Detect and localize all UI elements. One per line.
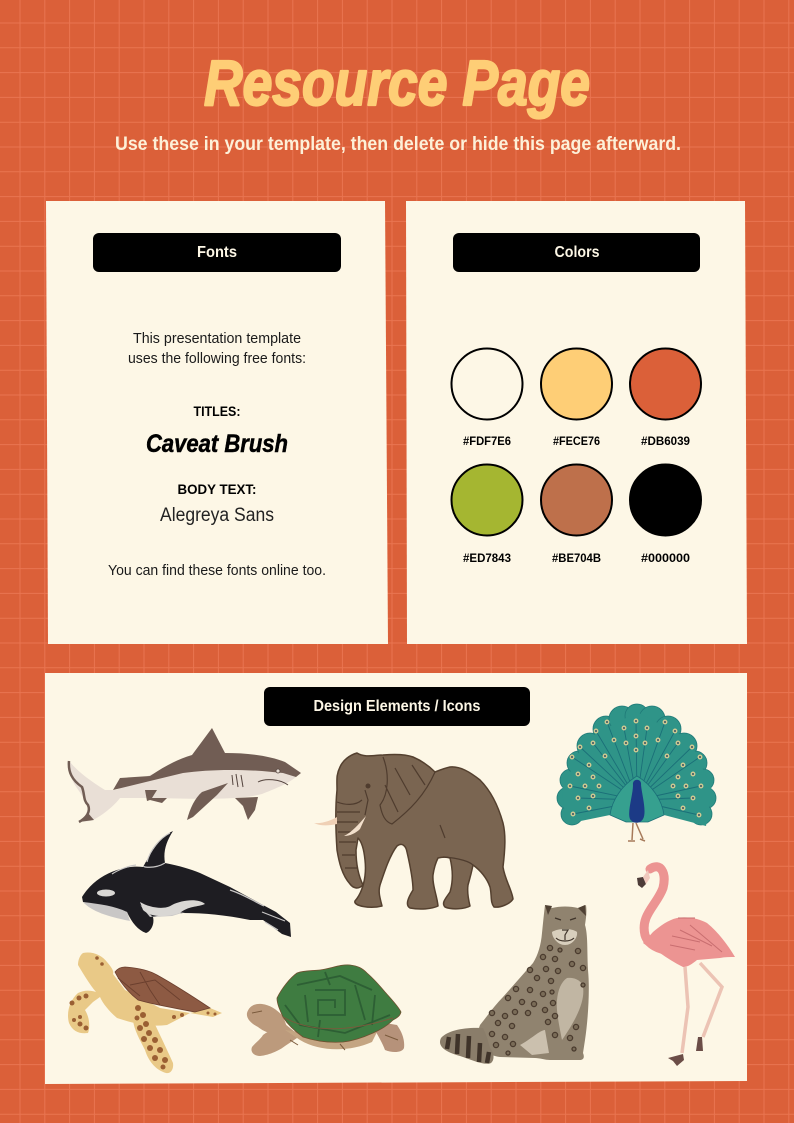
- text: titles font: TITLES:: [194, 403, 240, 419]
- swatch: ED7843: #ED7843: [463, 553, 511, 565]
- swatch: BE704B: [541, 464, 612, 565]
- text: intro: This presentation template: [133, 330, 301, 347]
- swatch: FDF7E6: #FDF7E6: [463, 436, 511, 448]
- icon: orca: [82, 831, 291, 937]
- text: titles font: Caveat Brush: [146, 430, 288, 458]
- swatch: 000000: #000000: [641, 553, 690, 565]
- heading: fonts: Fonts: [197, 244, 237, 261]
- icon: tortoise: [247, 965, 404, 1056]
- icon: sea turtle: [68, 952, 222, 1073]
- swatch: BE704B: #BE704B: [552, 553, 601, 565]
- heading: colors: [453, 233, 700, 272]
- text: titles font: [146, 403, 288, 458]
- swatch: FECE76: [541, 348, 612, 448]
- swatch: FDF7E6: [452, 348, 522, 448]
- text: intro: [128, 330, 306, 367]
- panel: colors: [406, 201, 747, 644]
- text: body font: BODY TEXT:: [178, 481, 256, 497]
- panel: fonts: [46, 201, 388, 644]
- swatch: DB6039: [630, 348, 701, 448]
- subtitle: Use these in your template, then delete or hide this page afterward.: [115, 134, 681, 155]
- text: note: You can find these fonts online too.: [108, 562, 326, 579]
- swatch: FECE76: #FECE76: [553, 436, 600, 448]
- heading: design elements: Design Elements / Icons: [314, 698, 481, 715]
- icon: flamingo: [637, 867, 735, 1066]
- heading: colors: Colors: [554, 244, 600, 261]
- icon: elephant: [314, 753, 513, 909]
- icon: shark: [69, 728, 301, 822]
- swatch: 000000: [630, 464, 701, 565]
- title: Resource Page: [204, 47, 590, 119]
- text: body font: [160, 481, 274, 526]
- panel: design elements: [45, 673, 747, 1084]
- heading: design elements: [264, 687, 530, 726]
- swatch: ED7843: [452, 464, 522, 565]
- heading: fonts: [93, 233, 341, 272]
- icon: snow leopard: [440, 905, 589, 1064]
- icon: peacock: [557, 704, 716, 841]
- swatch: DB6039: #DB6039: [641, 436, 690, 448]
- text: intro: uses the following free fonts:: [128, 350, 306, 367]
- text: body font: Alegreya Sans: [160, 505, 274, 526]
